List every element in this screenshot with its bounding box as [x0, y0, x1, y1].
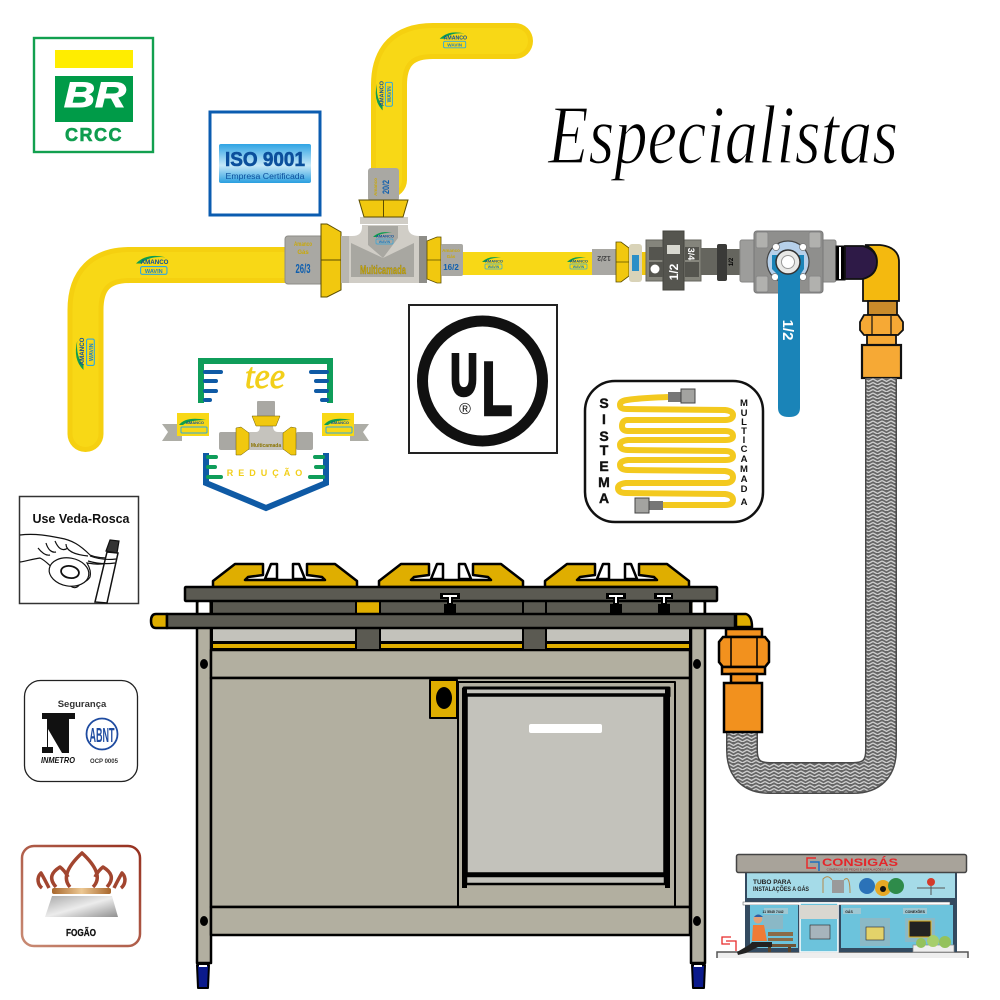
oven door	[458, 682, 675, 906]
coupling 12/2: 12/2	[597, 254, 611, 261]
label: multicamada: M	[740, 464, 748, 475]
label: sistema: T	[600, 442, 609, 458]
green top bracket	[201, 361, 330, 403]
mini tee fitting: Multicamada	[251, 443, 281, 449]
elbow connector	[836, 245, 903, 378]
control knobs	[440, 593, 673, 613]
yellow nut	[616, 242, 629, 282]
pipe: top yellow	[389, 41, 515, 180]
logo: pipe marking thin section 2	[567, 257, 588, 269]
label: multicamada: I	[743, 435, 745, 446]
label: multicamada: L	[741, 417, 747, 428]
icon: burner bar	[52, 888, 111, 894]
logo: BR CRCC: CRCC	[65, 125, 123, 145]
label: sistema: E	[599, 458, 609, 474]
UL certification: ®	[459, 401, 471, 418]
logo: pipe marking top vertical	[376, 80, 393, 110]
UL certification: L	[482, 347, 512, 432]
label: sistema	[598, 395, 610, 506]
white sill	[743, 902, 950, 905]
logo: tee body marking: AMANCO	[376, 234, 394, 238]
panel: fogão	[22, 846, 140, 946]
yellow tag right: AMANCO	[331, 420, 349, 425]
gray cross fitting: 1/2	[667, 263, 681, 280]
logo: pipe marking left horizontal	[136, 256, 169, 275]
shrub planter	[913, 935, 954, 952]
label: redução: REDUÇÃO	[227, 468, 307, 478]
logo: pipe marking top horizontal: AMANCO	[444, 35, 467, 41]
logo: tee body marking	[373, 232, 394, 244]
logo: pipe marking thin section 1: WAVIN	[488, 265, 500, 269]
green tick marks	[208, 457, 323, 477]
logo: pipe marking left vertical: AMANCO	[79, 337, 86, 365]
UL certification	[409, 305, 557, 453]
script tee heading: tee	[245, 356, 285, 396]
lower windows: CONEXÕES	[905, 909, 926, 914]
beige adapter	[629, 244, 642, 282]
bottom connector	[635, 498, 663, 513]
stove illustration	[151, 564, 752, 988]
right nut	[427, 237, 441, 283]
label: sistema: I	[602, 411, 606, 427]
icon: burner base	[45, 896, 118, 917]
label: multicamada: U	[741, 408, 748, 419]
logo: ISO 9001: Empresa Certificada	[226, 172, 305, 181]
panel: use veda-rosca	[20, 496, 138, 604]
roof sign: CONSIGÁS	[822, 856, 898, 869]
logo: tee body marking: WAVIN	[379, 240, 391, 244]
logo: pipe marking left horizontal: AMANCO	[141, 259, 169, 266]
logo: pipe marking left horizontal: WAVIN	[145, 269, 163, 275]
panel under rail	[212, 601, 690, 650]
lower windows: 11 5545 7442	[762, 910, 784, 914]
roof sign	[736, 854, 966, 872]
ribbon right	[350, 424, 369, 441]
braided gas hose	[742, 378, 881, 778]
gray cross fitting: 3/4	[686, 248, 696, 260]
title: Especialistas: Especialistas	[547, 89, 898, 182]
legs	[197, 601, 705, 963]
yellow tag left: AMANCO	[186, 420, 204, 425]
gas rail	[151, 614, 752, 628]
inline connector assembly	[592, 231, 740, 290]
yellow tag left	[177, 413, 209, 436]
lever label: 1/2	[779, 320, 796, 340]
corner logo	[722, 937, 736, 951]
logo: ISO 9001	[210, 112, 320, 215]
logo: pipe marking top horizontal: WAVIN	[447, 42, 463, 47]
label: multicamada: D	[741, 484, 748, 495]
upper sign panel: TUBO PARA	[753, 879, 791, 886]
label: sistema: M	[598, 474, 610, 490]
tee fitting assembly	[285, 168, 463, 297]
panel: safety certification	[24, 680, 138, 782]
label: multicamada: A	[741, 474, 748, 485]
control box	[430, 680, 457, 718]
lever handle	[772, 255, 804, 417]
left nut	[321, 224, 341, 297]
ribbon left	[162, 424, 182, 441]
bench and person	[737, 914, 796, 955]
logo: BR CRCC	[34, 38, 153, 152]
panel: use veda-rosca: Use Veda-Rosca	[32, 512, 131, 526]
logo: pipe marking thin section 1: AMANCO	[485, 258, 503, 264]
UL certification: U	[450, 343, 478, 408]
label: multicamada: C	[741, 444, 748, 455]
threaded adapter: 1/2	[729, 257, 735, 266]
left coupling 26/3: Amanco	[294, 242, 312, 248]
white gaps by leg tops	[199, 602, 703, 613]
panel: fogão: FOGÃO	[66, 926, 96, 939]
logo: pipe marking thin section 1	[482, 257, 503, 269]
coupling 12/2	[592, 249, 617, 275]
top connector	[668, 389, 695, 403]
blue tick marks	[205, 372, 327, 400]
burner grates 2	[379, 564, 523, 587]
left coupling 26/3: 26/3	[296, 261, 310, 276]
logo: ISO 9001: ISO 9001	[225, 149, 305, 171]
label: multicamada: A	[741, 454, 748, 465]
casters	[197, 965, 705, 988]
tee body	[341, 217, 427, 283]
label: multicamada	[740, 398, 748, 508]
icon: ABNT mark: ABNT	[90, 725, 114, 747]
pipe: left yellow	[86, 265, 292, 434]
gray cross fitting	[646, 231, 701, 290]
Tee reduction badge	[162, 356, 369, 508]
lower windows: GÁS	[845, 909, 853, 914]
orange gas fitting at stove	[719, 629, 769, 732]
ball valve with lever	[740, 231, 836, 417]
label: sistema: A	[599, 490, 609, 506]
right coupling 16/2: 16/2	[443, 263, 459, 272]
logo: pipe marking left vertical	[76, 337, 95, 370]
top coupling 20/2	[368, 168, 399, 201]
threaded adapter	[701, 244, 740, 281]
label: multicamada: A	[741, 497, 748, 508]
upper sign panel: INSTALAÇÕES A GÁS	[753, 884, 810, 893]
burner grates 1	[213, 564, 357, 587]
building wall	[745, 872, 957, 952]
logo: pipe marking thin section 2: AMANCO	[570, 258, 588, 264]
left coupling 26/3	[285, 236, 323, 284]
icon: flames	[38, 853, 125, 888]
panel: safety certification: Segurança	[58, 699, 107, 710]
coiled yellow tube	[618, 397, 733, 505]
floor	[717, 952, 968, 958]
burner grates 3	[545, 564, 689, 587]
blue lower bracket	[206, 453, 326, 508]
roof sign: COMÉRCIO DE PEÇAS E INSTALAÇÕES A GÁS	[827, 866, 893, 872]
mini tee fitting	[219, 401, 313, 455]
top coupling 20/2: 20/2	[381, 180, 391, 194]
top coupling 20/2: Amanco	[373, 178, 378, 196]
left coupling 26/3: Gás	[297, 250, 309, 256]
logo: pipe marking thin section 2: WAVIN	[573, 265, 585, 269]
logo: pipe marking top vertical: AMANCO	[379, 80, 385, 106]
logo: pipe marking top vertical: WAVIN	[387, 86, 393, 102]
panel: sistema multicamada	[585, 381, 763, 522]
label: multicamada: T	[741, 426, 747, 437]
label: multicamada: M	[740, 398, 748, 409]
icon: hand wrapping tape on pipe	[20, 534, 119, 603]
screws	[200, 659, 701, 926]
label: sistema: S	[599, 395, 609, 411]
icon: INMETRO mark: INMETRO	[41, 755, 75, 765]
body panels	[211, 650, 690, 935]
right coupling 16/2: Amanco	[442, 248, 460, 253]
tee body: Multicamada	[360, 263, 406, 277]
lever hub	[776, 250, 800, 274]
storefront: Consigás	[717, 854, 968, 958]
upper sign panel	[747, 873, 955, 898]
top nut	[359, 200, 408, 217]
logo: pipe marking top horizontal	[440, 32, 467, 48]
door handle	[529, 724, 602, 733]
yellow tag right	[322, 413, 354, 436]
lower windows	[750, 903, 953, 952]
panel: safety certification: OCP 0005	[90, 759, 119, 765]
pipe: thin yellow section	[460, 252, 595, 275]
right coupling 16/2: Gás	[447, 254, 456, 259]
label: sistema: S	[599, 428, 609, 444]
cooktop plate	[185, 587, 717, 601]
logo: BR CRCC: BR	[64, 76, 127, 115]
right coupling 16/2	[441, 244, 463, 276]
logo: pipe marking left vertical: WAVIN	[89, 343, 95, 361]
